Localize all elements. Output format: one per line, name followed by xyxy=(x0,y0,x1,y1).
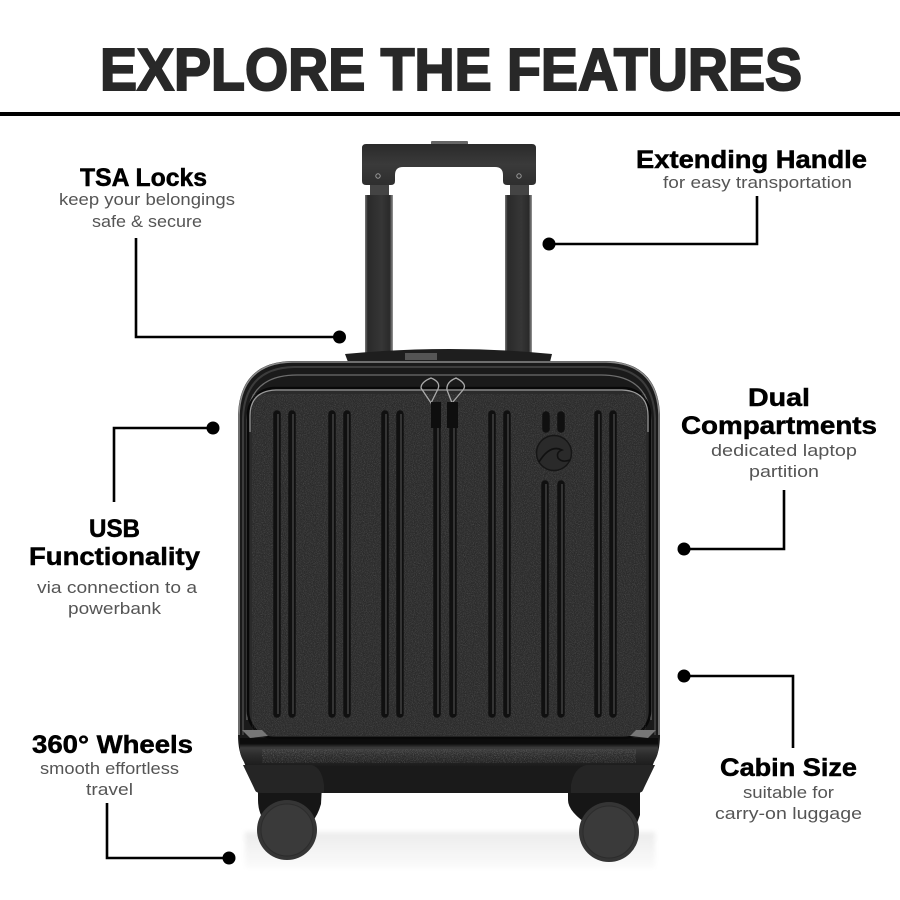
speckled finish xyxy=(252,394,646,736)
vertical ribs xyxy=(277,414,614,714)
marker dot xyxy=(678,670,690,682)
corner glints xyxy=(242,730,268,738)
shell highlights xyxy=(239,362,659,735)
heading: 360 Wheels: 360° Wheels xyxy=(32,731,193,759)
leader line: Wheels xyxy=(107,803,229,858)
heading: Dual Compartments: Dual xyxy=(748,384,810,412)
leader line: Extending Handle xyxy=(549,196,757,244)
heading: TSA Locks: TSA Locks xyxy=(80,164,207,192)
callout: 360 Wheels xyxy=(32,731,236,864)
text: TSA description: keep your belongings xyxy=(59,191,235,209)
floor shadow xyxy=(245,832,655,868)
lower shell band xyxy=(240,738,658,766)
right wheel xyxy=(568,785,640,862)
marker dot xyxy=(333,330,346,344)
brand logo badge xyxy=(536,436,572,470)
text: Cabin description: carry-on luggage xyxy=(715,805,862,823)
callout: USB Functionality xyxy=(29,422,220,618)
text: handle description: for easy transportation xyxy=(663,174,852,192)
heading: Extending Handle: Extending Handle xyxy=(636,146,867,174)
heading: USB Functionality: Functionality xyxy=(29,543,200,571)
marker dot xyxy=(222,852,236,864)
top zipper rim xyxy=(345,349,552,362)
suitcase product image xyxy=(238,141,660,868)
text: USB description: powerbank xyxy=(68,600,162,618)
title divider rule xyxy=(0,112,900,116)
wheel housings xyxy=(243,765,324,793)
callout: Cabin Size xyxy=(678,670,862,823)
marker dot xyxy=(542,238,556,250)
callout: TSA Locks xyxy=(59,164,346,344)
leader line: USB xyxy=(114,428,213,502)
suitcase shell xyxy=(238,361,660,793)
leader line: Dual xyxy=(684,490,784,549)
zipper pulls xyxy=(405,353,464,428)
heading: Dual Compartments: Compartments xyxy=(681,412,877,440)
text: Dual description: partition xyxy=(749,463,819,481)
leader line: Cabin xyxy=(684,676,793,748)
front pocket panel xyxy=(248,388,650,738)
left wheel xyxy=(257,785,322,860)
marker dot xyxy=(206,422,220,434)
text: Dual description: dedicated laptop xyxy=(711,442,857,460)
telescopic handle xyxy=(362,141,536,355)
callout: Dual Compartments xyxy=(678,384,877,556)
text: Cabin description: suitable for xyxy=(743,784,835,802)
leader line: TSA Locks xyxy=(136,238,340,337)
text: TSA description: safe & secure xyxy=(92,213,202,231)
marker dot xyxy=(678,542,690,556)
title: EXPLORE THE FEATURES xyxy=(100,37,802,103)
text: USB description: via connection to a xyxy=(37,579,198,597)
heading: USB Functionality: USB xyxy=(89,515,140,543)
text: Wheels description: travel xyxy=(86,781,133,799)
heading: Cabin Size: Cabin Size xyxy=(720,754,857,782)
text: Wheels description: smooth effortless xyxy=(40,760,179,778)
callout: Extending Handle xyxy=(542,146,867,250)
